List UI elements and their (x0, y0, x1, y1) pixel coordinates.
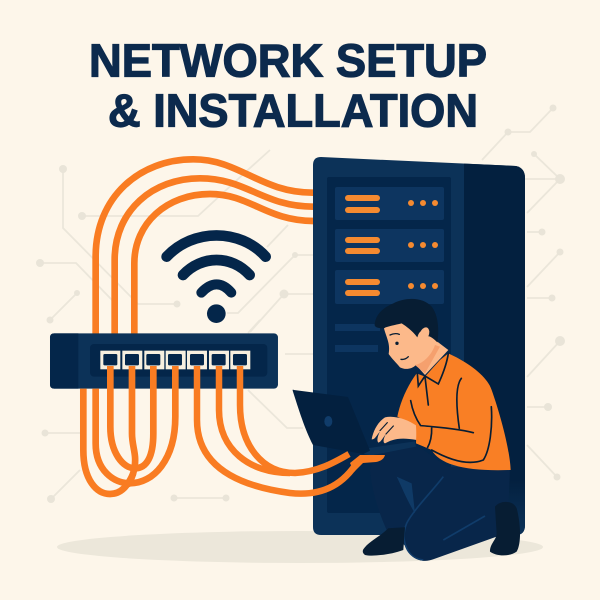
finger lines (380, 423, 393, 434)
rack inner panel (327, 177, 451, 513)
eye and mouth (390, 334, 408, 359)
title: & INSTALLATION (108, 84, 478, 136)
knee highlight (397, 477, 415, 513)
server unit 2 (335, 229, 444, 262)
lower cables (83, 366, 175, 494)
shirt cuff (416, 426, 432, 448)
shirt lines (411, 353, 492, 462)
laptop screen (293, 390, 370, 454)
server rack (313, 157, 525, 535)
cable plug at laptop (350, 455, 385, 472)
ports (100, 351, 250, 369)
server unit 1 (335, 187, 444, 220)
title: NETWORK SETUP (89, 34, 487, 86)
ear (419, 327, 429, 340)
laptop (293, 390, 416, 455)
wifi icon (167, 235, 266, 323)
title (89, 34, 487, 136)
laptop base (360, 441, 416, 455)
boots (363, 527, 405, 556)
rack body (313, 157, 525, 535)
trousers (370, 445, 510, 561)
rack vent bars (335, 324, 380, 352)
hair (375, 299, 438, 342)
upper cables to server (96, 159, 313, 334)
hand (372, 417, 417, 443)
network switch (50, 333, 278, 389)
background circuit pattern (36, 104, 565, 503)
ground shadow (57, 531, 543, 563)
server unit 3 (335, 270, 444, 304)
person (293, 299, 520, 561)
cables to laptop (197, 366, 358, 494)
neck shadow (415, 345, 440, 373)
shirt (397, 353, 511, 470)
rack side panel (464, 164, 525, 535)
neck and face (384, 317, 448, 375)
port panel (90, 344, 267, 377)
